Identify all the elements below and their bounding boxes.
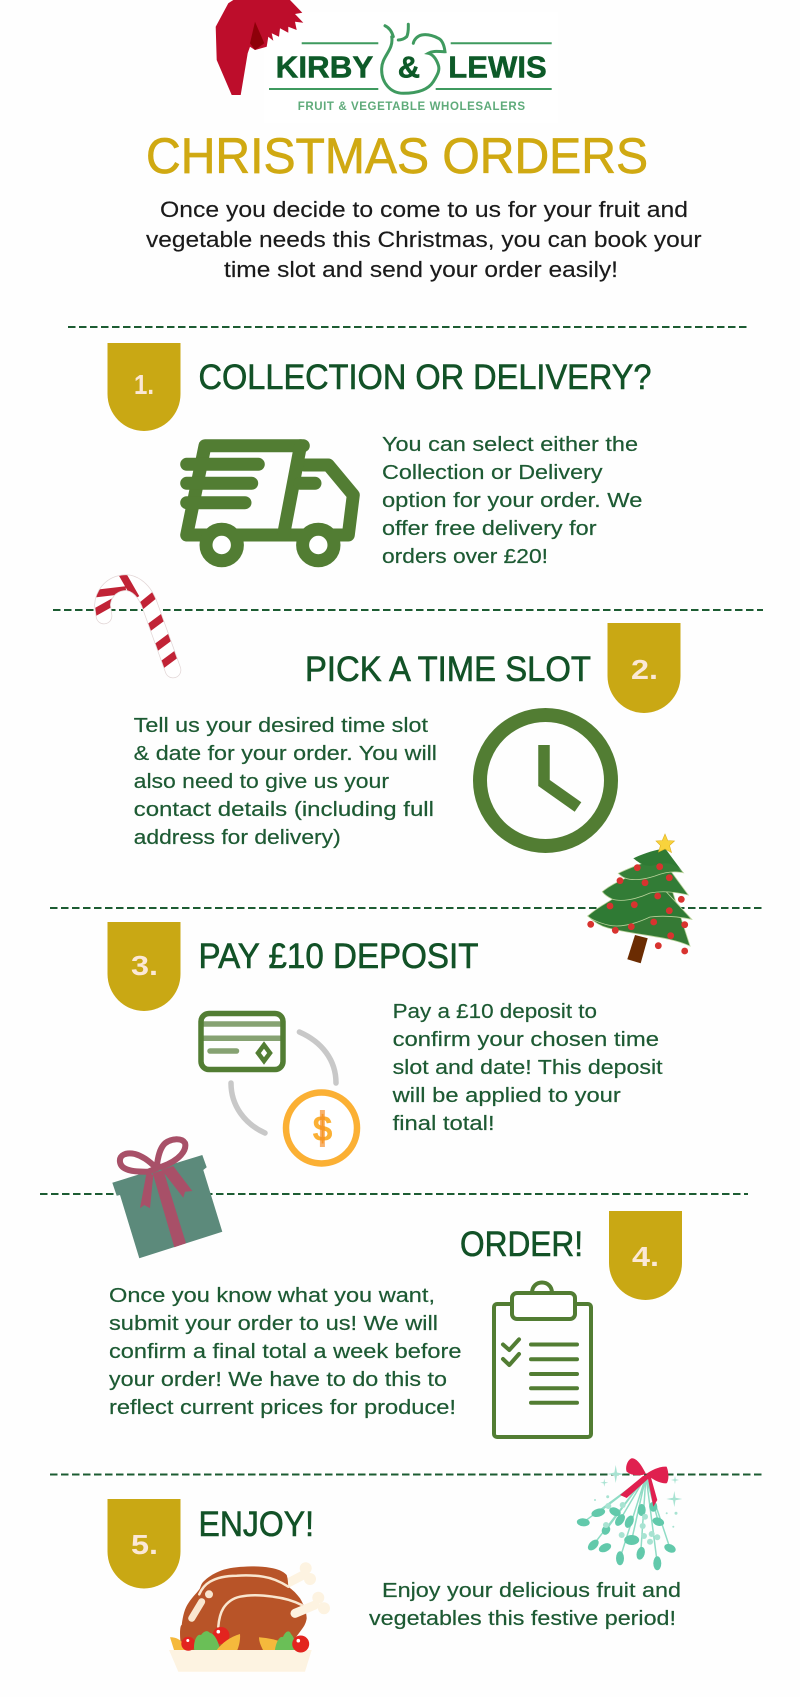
icon: christmas tree <box>587 834 692 963</box>
icon: mistletoe <box>576 1458 682 1570</box>
badge: number 5 <box>108 1499 180 1588</box>
icon: santa hat <box>216 0 303 95</box>
icon: gift box <box>112 1139 222 1258</box>
text: step 2 description: contact details (including full <box>134 799 434 821</box>
icon: exchange arcs <box>231 1032 336 1133</box>
text: step 5 description: vegetables this festive period! <box>369 1608 676 1630</box>
intro text: vegetable needs this Christmas, you can book your <box>146 227 702 252</box>
badge: number 3 <box>108 922 180 1011</box>
text: step 3 description: confirm your chosen time <box>393 1029 659 1051</box>
text: step 1 description <box>382 434 642 568</box>
badge: number 1 <box>108 343 180 431</box>
panel: step 5 enjoy <box>108 1499 681 1672</box>
badge: number 4: 4. <box>632 1241 659 1272</box>
heading: collection or delivery: COLLECTION OR DELIVERY? <box>198 358 652 397</box>
icon: dollar coin: $ <box>312 1108 333 1149</box>
text: step 5 description <box>369 1580 681 1630</box>
logo: Kirby & Lewis: LEWIS <box>448 50 547 85</box>
badge: number 4 <box>609 1211 682 1300</box>
text: step 4 description: submit your order to us! We will <box>109 1313 438 1335</box>
text: step 1 description: option for your order. We <box>382 490 642 512</box>
heading: pick a time slot: PICK A TIME SLOT <box>305 650 591 689</box>
icon: clock <box>480 715 611 846</box>
icon: dollar coin <box>286 1092 357 1164</box>
badge: number 2 <box>608 623 680 713</box>
panel: step 1 collection or delivery <box>108 343 652 568</box>
text: step 4 description: confirm a final total a week before <box>109 1341 461 1363</box>
heading: order: ORDER! <box>460 1225 583 1264</box>
icon: credit card <box>199 1014 285 1070</box>
title: CHRISTMAS ORDERS <box>146 128 648 184</box>
icon: roast turkey <box>169 1562 330 1672</box>
icon: clipboard checklist <box>494 1282 591 1437</box>
badge: number 3: 3. <box>131 950 158 981</box>
icon: candy cane <box>90 570 182 670</box>
text: step 2 description <box>134 715 437 849</box>
text: step 1 description: offer free delivery for <box>382 518 597 540</box>
intro text <box>146 197 702 282</box>
badge: number 1: 1. <box>134 369 154 400</box>
text: step 3 description: Pay a £10 deposit to <box>393 1001 597 1023</box>
text: step 4 description <box>109 1285 461 1419</box>
text: step 1 description: You can select either the <box>382 434 638 456</box>
heading: enjoy: ENJOY! <box>198 1505 314 1544</box>
heading: pay deposit: PAY £10 DEPOSIT <box>198 937 478 976</box>
logo: Kirby & Lewis: & <box>398 50 420 85</box>
icon: delivery truck <box>187 446 353 561</box>
badge: number 2: 2. <box>631 654 658 685</box>
logo: Kirby & Lewis: FRUIT & VEGETABLE WHOLESALERS <box>298 101 525 113</box>
text: step 3 description: will be applied to your <box>391 1085 621 1107</box>
panel: step 4 order <box>109 1211 682 1437</box>
text: step 2 description: & date for your order. You will <box>134 743 437 765</box>
text: step 3 description <box>391 1001 663 1135</box>
text: step 4 description: reflect current prices for produce! <box>109 1397 456 1419</box>
text: step 4 description: your order! We have to do this to <box>109 1369 447 1391</box>
text: step 4 description: Once you know what you want, <box>109 1285 435 1307</box>
badge: number 5: 5. <box>131 1529 158 1560</box>
intro text: Once you decide to come to us for your fruit and <box>160 197 688 222</box>
text: step 2 description: Tell us your desired time slot <box>134 715 429 737</box>
text: step 3 description: slot and date! This deposit <box>393 1057 663 1079</box>
logo: Kirby & Lewis <box>264 12 558 123</box>
text: step 1 description: orders over £20! <box>382 546 548 568</box>
logo: Kirby & Lewis: KIRBY <box>276 50 374 85</box>
text: step 5 description: Enjoy your delicious fruit and <box>382 1580 681 1602</box>
panel: step 3 pay deposit <box>108 922 663 1164</box>
text: step 2 description: also need to give us your <box>134 771 389 793</box>
intro text: time slot and send your order easily! <box>224 257 618 282</box>
panel: step 2 pick a time slot <box>134 623 680 849</box>
text: step 3 description: final total! <box>393 1113 495 1135</box>
text: step 2 description: address for delivery) <box>134 827 341 849</box>
text: step 1 description: Collection or Delivery <box>382 462 602 484</box>
